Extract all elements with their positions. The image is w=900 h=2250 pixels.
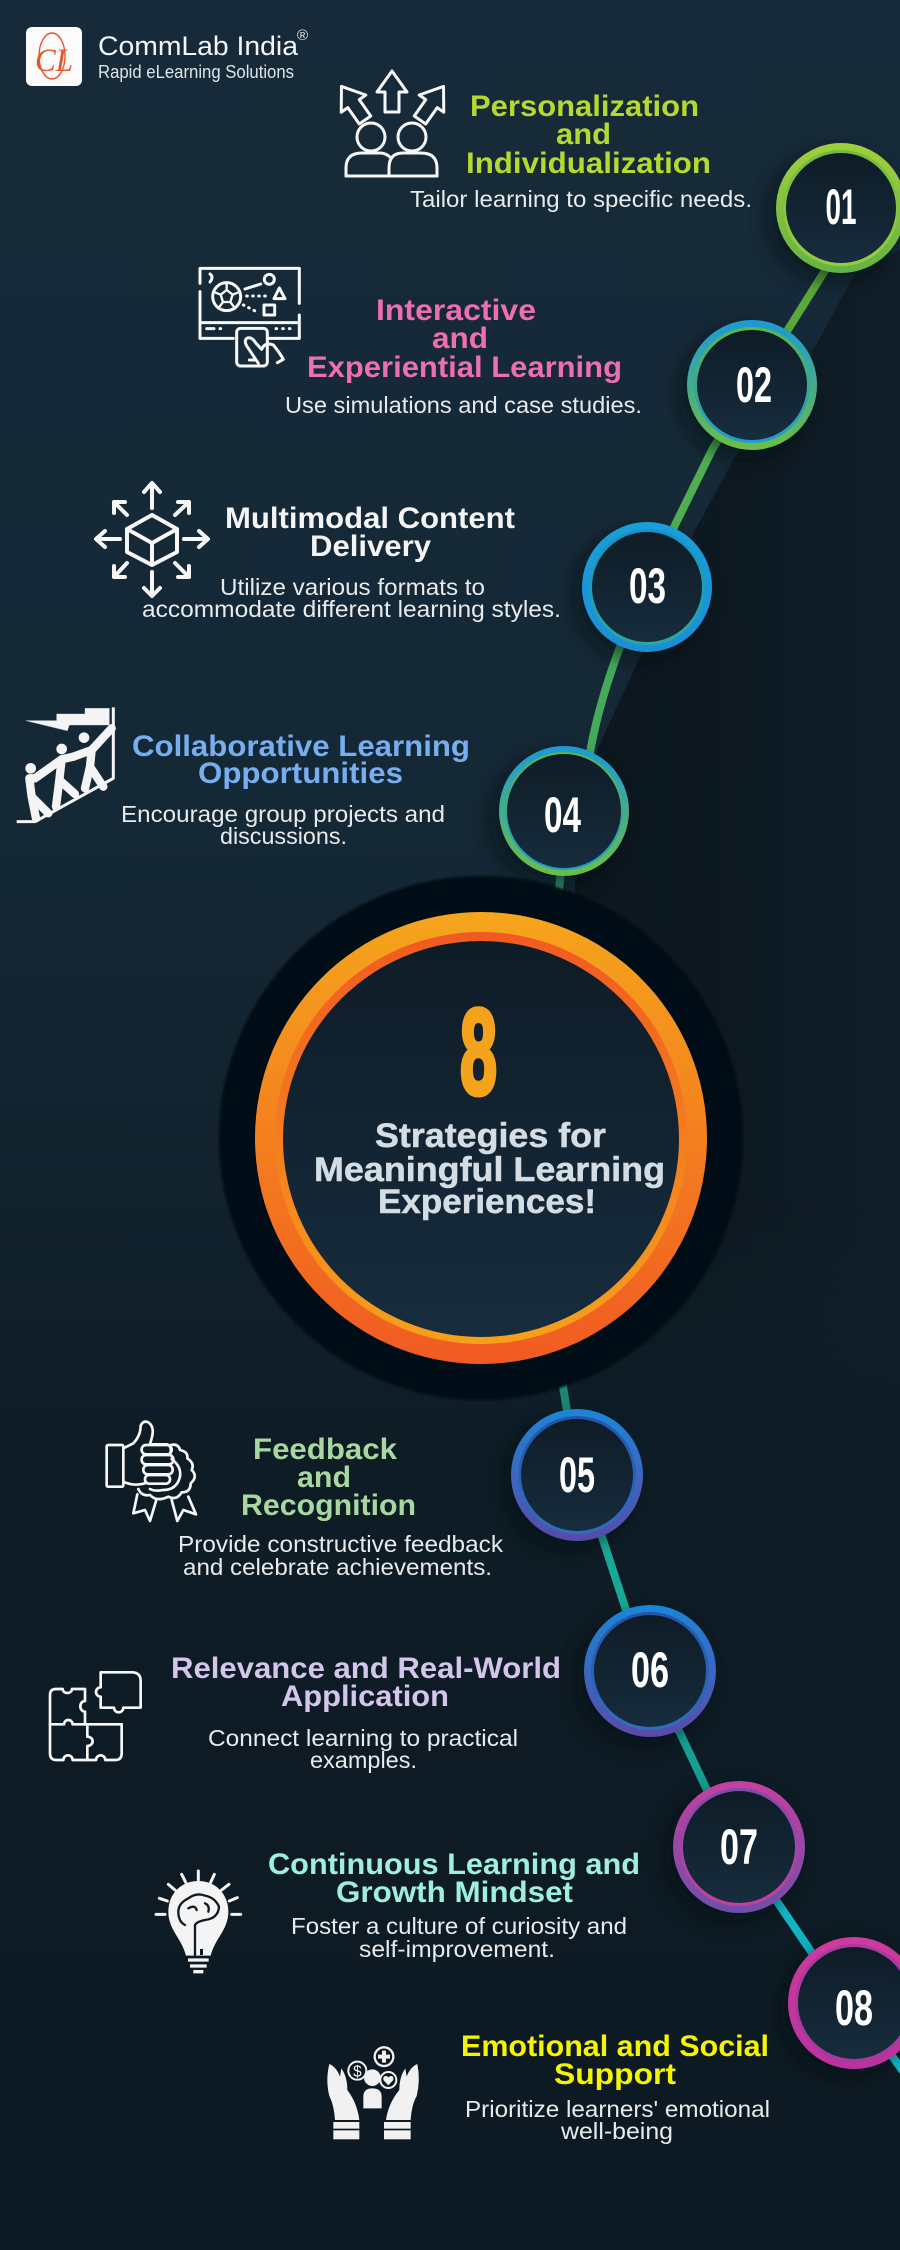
heading: Individualization: [466, 147, 711, 180]
description: self-improvement.: [359, 1936, 555, 1962]
heading: Delivery: [310, 530, 432, 563]
icon: caring hands: $: [353, 2063, 362, 2080]
heading: [461, 2030, 769, 2091]
heading: Support: [554, 2058, 676, 2091]
badge 07: 07: [720, 1819, 758, 1875]
badge 03: [574, 522, 712, 660]
heading: Experiential Learning: [307, 351, 622, 384]
heading: Growth Mindset: [336, 1876, 573, 1909]
description: Connect learning to practical: [208, 1725, 518, 1751]
description: Use simulations and case studies.: [285, 392, 642, 418]
item 1: personalization: [329, 71, 752, 212]
icon: caring hands: [327, 2047, 419, 2139]
badge 06: [577, 1605, 716, 1744]
heading: Personalization: [470, 90, 699, 123]
heading: [307, 294, 622, 384]
heading: Continuous Learning and: [268, 1848, 640, 1881]
icon: cube with arrows: [96, 483, 208, 596]
central title: Strategies for: [375, 1117, 606, 1155]
badge 04: [491, 746, 629, 884]
badge 01: 01: [826, 179, 856, 235]
badge 08: 08: [835, 1980, 873, 2036]
connector path: [558, 245, 900, 2095]
logo: ®: [297, 27, 308, 44]
heading: [171, 1652, 561, 1713]
badge 07: [666, 1781, 805, 1920]
badge 04: 04: [544, 787, 581, 843]
description: Utilize various formats to: [220, 574, 485, 600]
heading: Opportunities: [198, 757, 403, 790]
icon: team climbing: [17, 707, 113, 822]
heading: [466, 90, 711, 180]
central title: Meaningful Learning: [314, 1151, 665, 1189]
item 4: collaborative: [17, 707, 470, 849]
big number 8: 8: [460, 984, 497, 1120]
description: and celebrate achievements.: [183, 1554, 492, 1580]
logo: [26, 27, 308, 86]
logo: Rapid eLearning Solutions: [98, 61, 294, 82]
icon: arrows and people: [329, 71, 456, 176]
badge 05: [504, 1409, 643, 1548]
description: [142, 574, 561, 622]
description: [465, 2096, 770, 2144]
badge 05: 05: [559, 1447, 595, 1503]
heading: Application: [281, 1680, 449, 1713]
badge 08: [781, 1937, 900, 2076]
heading: Interactive: [376, 294, 536, 327]
item 6: relevance: [50, 1652, 561, 1773]
central title: [314, 1117, 665, 1221]
item 3: multimodal: [96, 483, 561, 622]
badge 06: 06: [631, 1642, 669, 1698]
heading: Relevance and Real-World: [171, 1652, 561, 1685]
central title: Experiences!: [378, 1183, 596, 1221]
logo: CommLab India: [98, 31, 299, 61]
logo: CL: [35, 43, 73, 79]
heading: [132, 730, 470, 790]
heading: Feedback: [253, 1433, 398, 1466]
heading: [241, 1433, 416, 1522]
icon: monitor and touch tablet: [200, 268, 299, 366]
item 5: feedback: [107, 1422, 504, 1580]
description: [208, 1725, 518, 1773]
heading: Emotional and Social: [461, 2030, 769, 2063]
heading: and: [556, 118, 611, 151]
description: accommodate different learning styles.: [142, 596, 561, 622]
heading: and: [432, 322, 488, 355]
badge 02: 02: [736, 357, 772, 413]
heading: [268, 1848, 640, 1909]
description: Foster a culture of curiosity and: [291, 1913, 627, 1939]
icon: light bulb with brain: [156, 1871, 241, 1972]
item 7: continuous learning: [156, 1848, 640, 1972]
item 2: interactive: [200, 268, 642, 418]
icon: thumbs-up with award badge: [107, 1422, 196, 1521]
item 8: emotional support: [327, 2030, 770, 2144]
badge 02: [679, 320, 817, 458]
description: Provide constructive feedback: [178, 1531, 504, 1557]
badge 01: [768, 143, 900, 281]
icon: puzzle pieces: [50, 1672, 141, 1760]
central circle: [219, 876, 743, 1400]
description: Tailor learning to specific needs.: [410, 186, 752, 212]
description: [291, 1913, 627, 1962]
description: well-being: [560, 2118, 673, 2144]
description: discussions.: [220, 823, 347, 849]
dark shadow band right of the path: [575, 250, 900, 1252]
description: Encourage group projects and: [121, 801, 445, 827]
description: Prioritize learners' emotional: [465, 2096, 770, 2122]
description: [178, 1531, 504, 1580]
heading: Recognition: [241, 1489, 416, 1522]
heading: Multimodal Content: [225, 502, 515, 535]
heading: [225, 502, 515, 563]
badge 03: 03: [629, 558, 666, 614]
description: [121, 801, 445, 849]
heading: Collaborative Learning: [132, 730, 470, 763]
heading: and: [297, 1461, 351, 1494]
description: examples.: [310, 1747, 417, 1773]
